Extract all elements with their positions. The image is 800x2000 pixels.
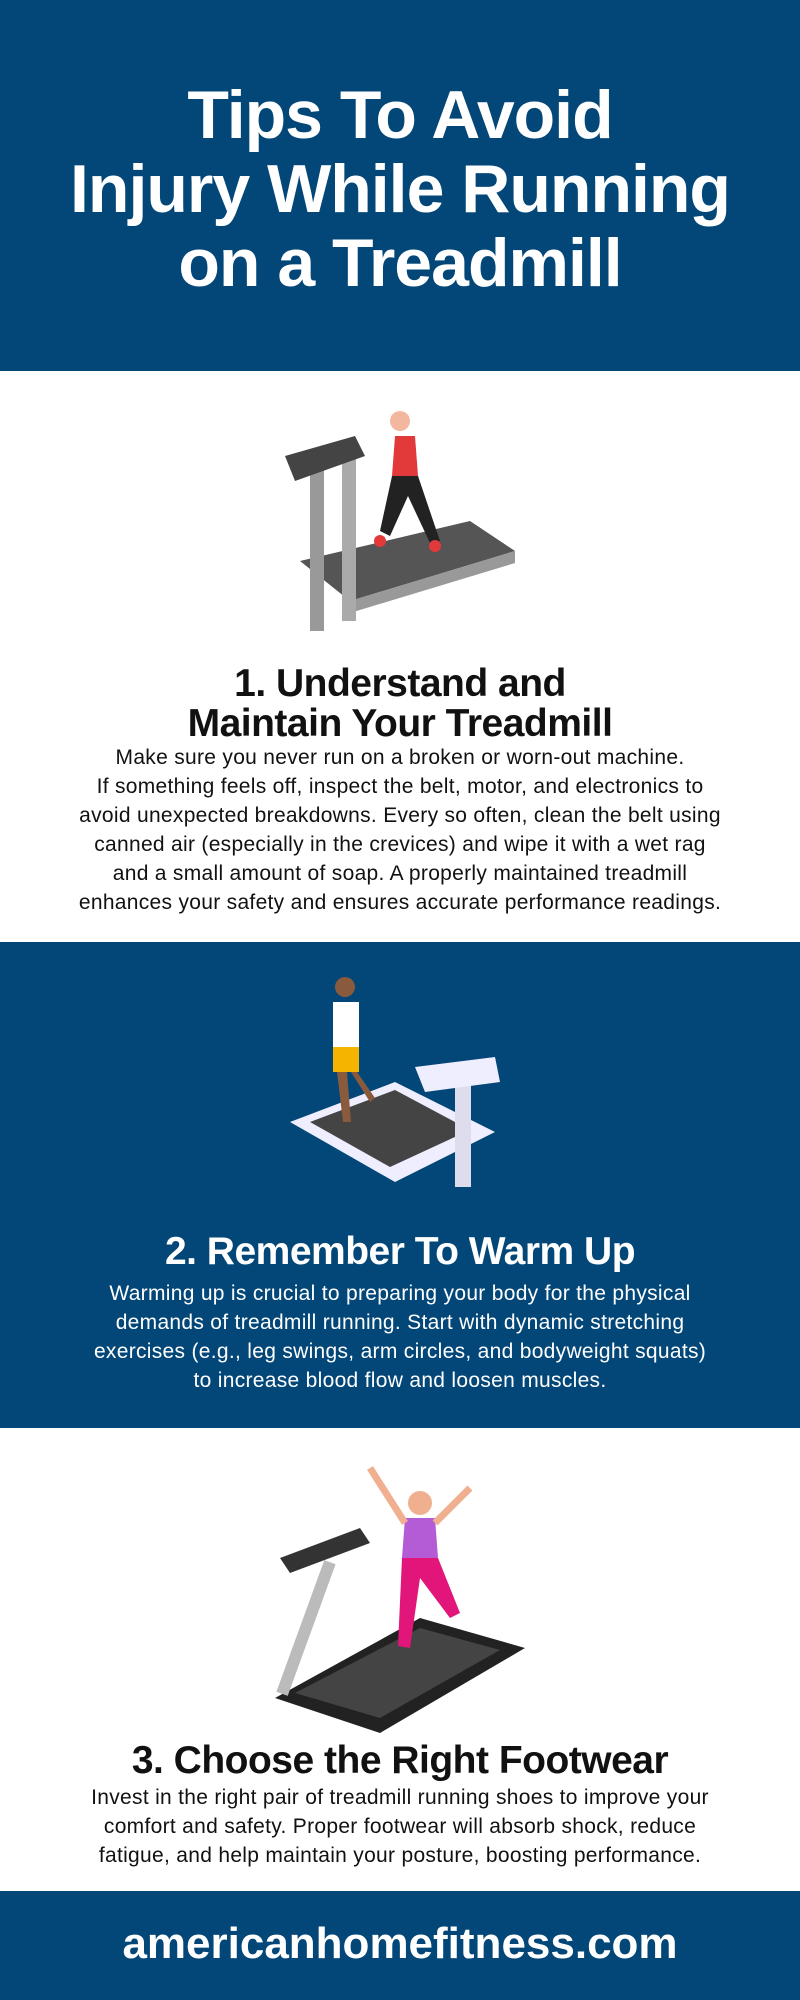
body text 3	[91, 1786, 709, 1867]
body text 2: to increase blood flow and loosen muscles.	[194, 1369, 606, 1392]
body text 2: Warming up is crucial to preparing your body for the physical	[109, 1282, 691, 1305]
footer url: americanhomefitness.com	[122, 1919, 678, 1968]
header panel	[0, 0, 800, 371]
panel: tip 1	[79, 411, 721, 914]
heading 2: 2. Remember To Warm Up	[165, 1230, 635, 1273]
title: on a Treadmill	[178, 225, 622, 301]
body text 2: exercises (e.g., leg swings, arm circles, and bodyweight squats)	[94, 1340, 706, 1363]
body text 2	[94, 1282, 706, 1392]
footer	[0, 1891, 800, 2000]
heading 1	[188, 662, 612, 745]
body text 3: fatigue, and help maintain your posture, boosting performance.	[99, 1844, 701, 1867]
panel: tip 3	[91, 1466, 709, 1867]
title: Injury While Running	[70, 151, 730, 227]
body text 1: canned air (especially in the crevices) and wipe it with a wet rag	[94, 833, 706, 856]
body text 3: Invest in the right pair of treadmill running shoes to improve your	[91, 1786, 709, 1809]
body text 1: Make sure you never run on a broken or worn-out machine.	[116, 746, 684, 769]
body text 2: demands of treadmill running. Start with dynamic stretching	[116, 1311, 684, 1334]
heading 3: 3. Choose the Right Footwear	[132, 1739, 668, 1782]
title: Tips To Avoid	[187, 77, 613, 153]
icon: treadmill with runner 2	[290, 977, 500, 1187]
body text 1: If something feels off, inspect the belt, motor, and electronics to	[97, 775, 703, 798]
title	[70, 77, 730, 301]
body text 1: enhances your safety and ensures accurate performance readings.	[79, 891, 721, 914]
body text 3: comfort and safety. Proper footwear will absorb shock, reduce	[104, 1815, 696, 1838]
body text 1: and a small amount of soap. A properly maintained treadmill	[113, 862, 687, 885]
heading 1: 1. Understand and	[234, 662, 566, 705]
body text 1: avoid unexpected breakdowns. Every so often, clean the belt using	[79, 804, 721, 827]
icon: treadmill with runner 1	[285, 411, 515, 631]
icon: treadmill with runner 3	[275, 1466, 525, 1733]
panel: tip 2	[0, 942, 800, 1428]
heading 1: Maintain Your Treadmill	[188, 702, 612, 745]
body text 1	[79, 746, 721, 914]
